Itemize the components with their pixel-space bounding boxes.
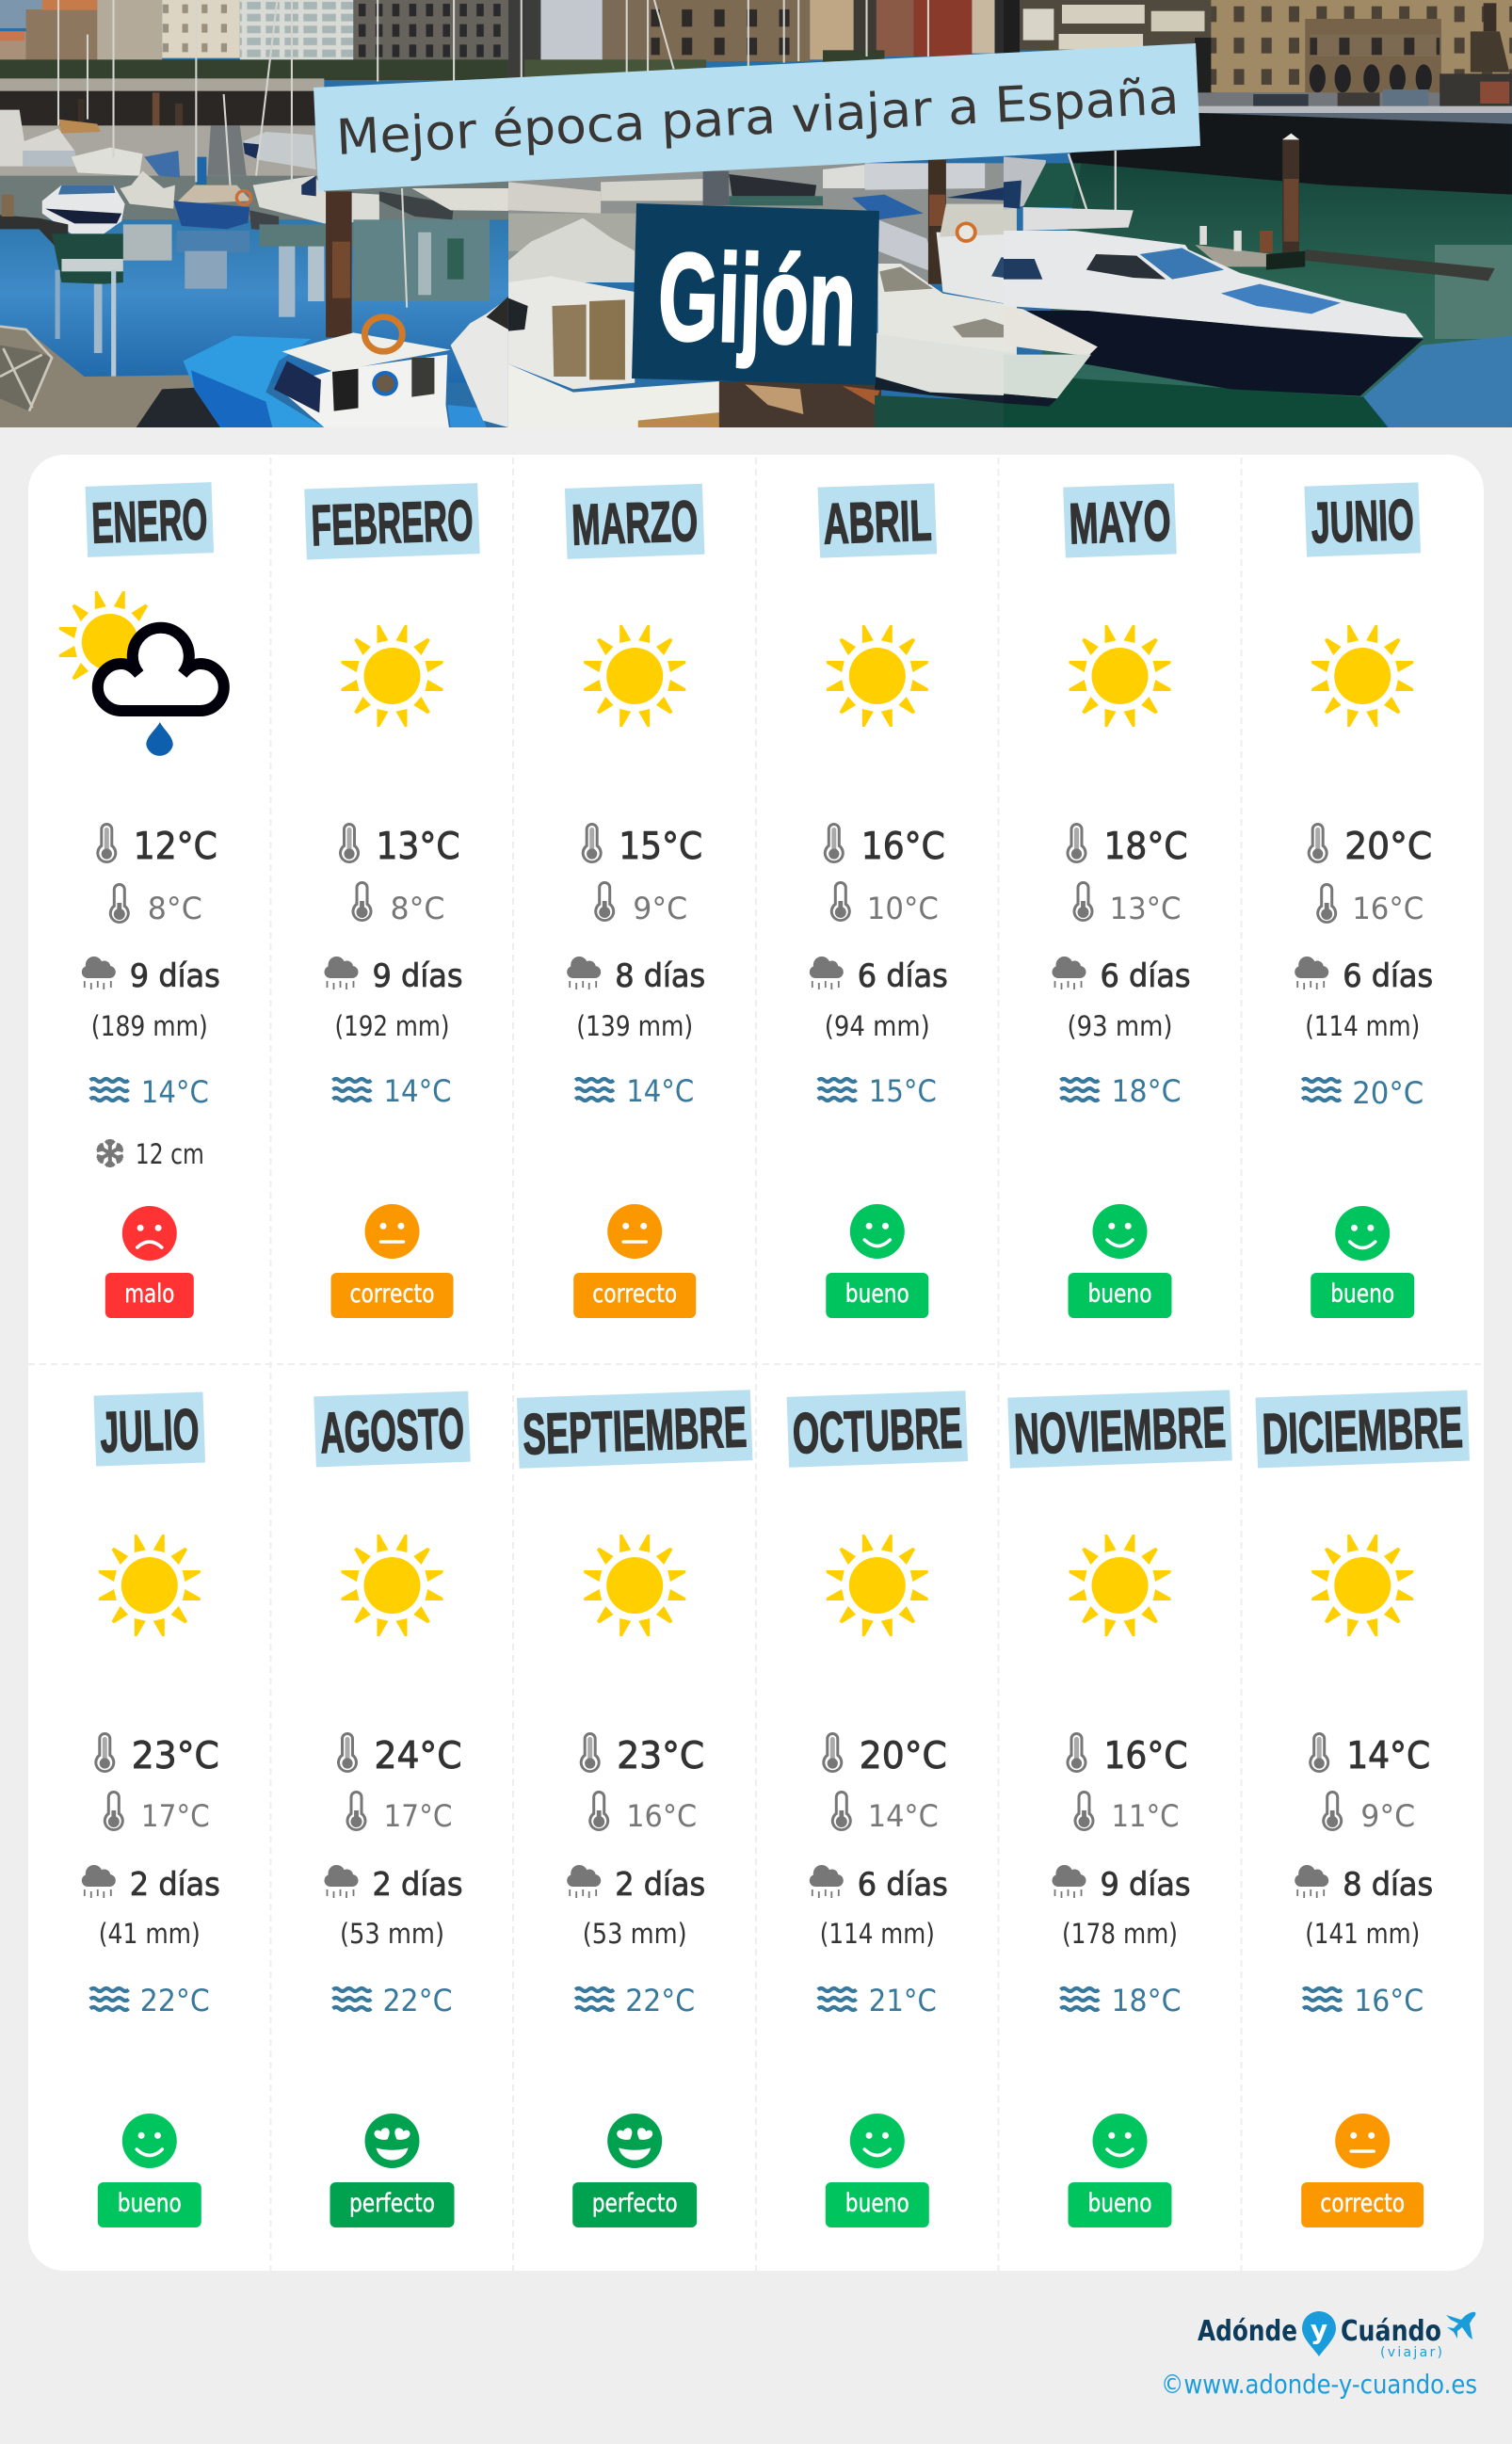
icon: min thermometer [1316, 883, 1337, 924]
panel: abril [810, 483, 948, 1318]
title banner [314, 43, 1200, 191]
rating badge: perfecto [572, 2182, 697, 2227]
month label: agosto [314, 1391, 471, 1467]
icon: rain cloud [567, 1865, 601, 1898]
logo: Adónde y Cuándo: Adónde [1198, 2315, 1297, 2348]
icon: happy face [850, 1204, 905, 1259]
min temperature: 10°C [867, 891, 939, 926]
month label: marzo: MARZO [571, 489, 699, 557]
icon: neutral face [1335, 2114, 1390, 2168]
icon: happy face [1335, 1206, 1390, 1261]
icon: sun [827, 625, 928, 727]
icon: sea waves [1302, 1079, 1341, 1101]
rainy days: 8 días [615, 957, 705, 995]
rating badge: bueno: bueno [1330, 1279, 1394, 1309]
icon: min thermometer [109, 883, 130, 924]
icon: rain cloud [1053, 957, 1086, 989]
icon: snowflake [96, 1139, 124, 1167]
icon: sun [1070, 625, 1171, 727]
month label: junio [1304, 482, 1421, 557]
icon: rain cloud [1295, 1865, 1328, 1898]
rainy days: 9 días [373, 957, 463, 995]
icon: max thermometer [1066, 823, 1086, 863]
icon: rain cloud [324, 957, 358, 989]
sea temperature: 18°C [1111, 1983, 1181, 2018]
rating badge: correcto [1301, 2182, 1424, 2227]
month label: mayo [1063, 483, 1177, 558]
rainy days: 9 días [1100, 1866, 1190, 1904]
logo: Adónde y Cuándo: (viajar) [1380, 2345, 1442, 2360]
rating badge: bueno [1068, 1273, 1171, 1318]
panel: febrero [304, 483, 480, 1318]
rating badge: correcto [331, 1273, 454, 1318]
city name box: Gijón: Gijón [656, 227, 858, 371]
icon: rain cloud [567, 957, 601, 989]
icon: min thermometer [831, 1791, 852, 1831]
rating badge: perfecto [330, 2182, 454, 2227]
rainy days: 6 días [1100, 957, 1190, 995]
rainfall: (94 mm) [825, 1010, 930, 1042]
icon: heart-eyes face [607, 2114, 662, 2168]
logo: Adónde y Cuándo: y [1311, 2314, 1327, 2345]
icon: max thermometer [822, 1732, 843, 1773]
icon: sea waves [1303, 1988, 1342, 2010]
icon: sun [99, 1535, 201, 1636]
min temperature: 9°C [1360, 1798, 1415, 1834]
icon: sun [1070, 1535, 1171, 1636]
month label: julio [94, 1391, 205, 1467]
icon: max thermometer [580, 1732, 601, 1773]
icon: sun [341, 625, 442, 727]
icon: max thermometer [96, 823, 117, 863]
snowfall: 12 cm [136, 1138, 204, 1170]
panel: mayo [1053, 483, 1190, 1318]
rainy days: 9 días [130, 957, 220, 995]
sea temperature: 22°C [140, 1983, 210, 2018]
sea temperature: 20°C [1352, 1075, 1424, 1111]
rating badge: perfecto: perfecto [592, 2189, 678, 2218]
icon: max thermometer [824, 823, 844, 863]
icon: sad face [122, 1206, 177, 1261]
rainy days: 6 días [1343, 957, 1433, 995]
month label: febrero: FEBRERO [310, 488, 475, 557]
max temperature: 14°C [1346, 1734, 1430, 1777]
icon: rain cloud [810, 957, 844, 989]
rating badge: bueno: bueno [845, 2189, 909, 2218]
panel: octubre [787, 1391, 968, 2227]
rating badge: perfecto: perfecto [349, 2189, 435, 2218]
month label: febrero [304, 483, 480, 559]
sea temperature: 22°C [625, 1983, 695, 2018]
icon: sea waves [333, 1988, 371, 2010]
max temperature: 20°C [860, 1734, 947, 1777]
panel: marzo [565, 484, 705, 1318]
icon: sun [1311, 625, 1413, 727]
rainfall: (41 mm) [99, 1918, 201, 1950]
min temperature: 8°C [148, 891, 202, 926]
max temperature: 23°C [132, 1734, 219, 1777]
month label: octubre [787, 1391, 968, 1468]
month label: septiembre: SEPTIEMBRE [522, 1394, 748, 1467]
rainfall: (114 mm) [1305, 1010, 1420, 1042]
icon: sea waves [818, 1079, 857, 1101]
icon: max thermometer [94, 1732, 115, 1773]
icon: sun [341, 1535, 442, 1636]
icon: sun [584, 1535, 685, 1636]
rating badge: bueno: bueno [845, 1279, 909, 1309]
rainfall: (93 mm) [1068, 1010, 1173, 1042]
icon: min thermometer [104, 1791, 124, 1831]
panel: julio [82, 1391, 220, 2227]
icon: sun with cloud and rain drop [59, 591, 224, 756]
month label: julio: JULIO [99, 1397, 201, 1464]
rating badge: bueno [826, 1273, 928, 1318]
icon: max thermometer [1066, 1732, 1086, 1773]
rating badge: bueno [1068, 2182, 1171, 2227]
month label: mayo: MAYO [1068, 489, 1172, 555]
panel: junio [1295, 482, 1433, 1318]
rating badge: bueno: bueno [1088, 2189, 1152, 2218]
panel: agosto [314, 1391, 471, 2227]
max temperature: 15°C [619, 825, 702, 868]
icon: max thermometer [337, 1732, 358, 1773]
month label: enero: ENERO [90, 487, 209, 555]
min temperature: 13°C [1109, 891, 1181, 926]
max temperature: 13°C [377, 825, 459, 868]
rainfall: (141 mm) [1305, 1918, 1420, 1950]
rainy days: 2 días [130, 1866, 220, 1904]
rainy days: 8 días [1343, 1866, 1433, 1904]
rainy days: 6 días [858, 957, 948, 995]
city name box: Gijón [632, 203, 879, 385]
panel: noviembre [1007, 1390, 1232, 2227]
icon: sea waves [818, 1988, 857, 2010]
rainfall: (139 mm) [576, 1010, 693, 1042]
icon: happy face [1092, 1204, 1147, 1259]
month label: marzo [565, 484, 704, 559]
max temperature: 23°C [617, 1734, 704, 1777]
rainfall: (53 mm) [583, 1918, 687, 1950]
icon: heart-eyes face [365, 2114, 420, 2168]
panel: septiembre [517, 1390, 752, 2227]
icon: sun [584, 625, 685, 727]
min temperature: 11°C [1111, 1798, 1179, 1834]
icon: max thermometer [1308, 823, 1328, 863]
rating badge: bueno [1311, 1273, 1414, 1318]
sea temperature: 14°C [141, 1074, 209, 1110]
icon: rain cloud [810, 1865, 844, 1898]
sea temperature: 16°C [1354, 1983, 1424, 2018]
icon: happy face [850, 2114, 905, 2168]
icon: sun [827, 1535, 928, 1636]
icon: min thermometer [1073, 881, 1094, 922]
logo: Adónde y Cuándo: Cuándo [1341, 2315, 1441, 2348]
header photo: Gijón marina [0, 0, 1512, 427]
rating badge: malo [105, 1273, 194, 1318]
rainfall: (192 mm) [335, 1010, 450, 1042]
icon: sea waves [1060, 1079, 1099, 1101]
icon: min thermometer [352, 881, 373, 922]
month label: noviembre: NOVIEMBRE [1013, 1395, 1227, 1466]
min temperature: 16°C [626, 1798, 697, 1834]
sea temperature: 22°C [382, 1983, 452, 2018]
month label: abril: ABRIL [822, 489, 933, 555]
icon: min thermometer [1322, 1791, 1343, 1831]
icon: neutral face [365, 1204, 420, 1259]
min temperature: 17°C [141, 1798, 210, 1834]
icon: rain cloud [324, 1865, 358, 1898]
icon: sea waves [575, 1988, 614, 2010]
icon: min thermometer [594, 881, 615, 922]
logo: Adónde y Cuándo [1198, 2311, 1475, 2360]
rating badge: correcto: correcto [592, 1279, 677, 1309]
rainy days: 6 días [858, 1866, 948, 1904]
icon: min thermometer [830, 881, 851, 922]
icon: max thermometer [339, 823, 360, 863]
min temperature: 17°C [384, 1798, 452, 1834]
min temperature: 9°C [633, 891, 687, 926]
month label: junio: JUNIO [1311, 488, 1415, 555]
rating badge: bueno: bueno [118, 2189, 182, 2218]
rainfall: (189 mm) [91, 1010, 208, 1042]
icon: min thermometer [588, 1791, 609, 1831]
min temperature: 14°C [868, 1798, 939, 1834]
icon: rain cloud [1053, 1865, 1086, 1898]
max temperature: 18°C [1103, 825, 1188, 868]
rainfall: (53 mm) [340, 1918, 444, 1950]
month label: octubre: OCTUBRE [792, 1395, 963, 1466]
rating badge: malo: malo [124, 1279, 174, 1309]
icon: sea waves [333, 1079, 371, 1101]
icon: rain cloud [82, 1865, 116, 1898]
max temperature: 16°C [861, 825, 945, 868]
max temperature: 20°C [1344, 825, 1432, 868]
icon: min thermometer [346, 1791, 367, 1831]
icon: sea waves [90, 1079, 129, 1101]
month label: enero [86, 482, 214, 557]
rainy days: 2 días [615, 1866, 705, 1904]
icon: rain cloud [1295, 957, 1328, 989]
rating badge: correcto [573, 1273, 696, 1318]
rainy days: 2 días [373, 1866, 463, 1904]
sea temperature: 15°C [869, 1073, 937, 1109]
min temperature: 8°C [390, 891, 444, 926]
month label: agosto: AGOSTO [319, 1396, 465, 1465]
panel: diciembre [1255, 1391, 1470, 2227]
rating badge: correcto: correcto [1320, 2189, 1405, 2218]
sea temperature: 21°C [869, 1983, 937, 2018]
month label: noviembre [1007, 1390, 1232, 1469]
icon: happy face [1092, 2114, 1147, 2168]
max temperature: 24°C [375, 1734, 461, 1777]
sea temperature: 18°C [1111, 1073, 1181, 1109]
rating badge: bueno: bueno [1088, 1279, 1152, 1309]
icon: sun [1311, 1535, 1413, 1636]
panel: enero [59, 482, 224, 1318]
main card [28, 455, 1484, 2271]
max temperature: 16°C [1103, 1734, 1188, 1777]
icon: happy face [122, 2114, 177, 2168]
min temperature: 16°C [1352, 891, 1424, 926]
rating badge: bueno [826, 2182, 929, 2227]
month label: septiembre [517, 1390, 752, 1469]
title banner: Mejor época para viajar a España [335, 69, 1181, 167]
month label: abril [818, 483, 937, 558]
icon: min thermometer [1073, 1791, 1094, 1831]
rating badge: bueno [98, 2182, 201, 2227]
icon: rain cloud [82, 957, 116, 989]
icon: max thermometer [582, 823, 603, 863]
rating badge: correcto: correcto [350, 1279, 435, 1309]
icon: sea waves [1060, 1988, 1099, 2010]
icon: sea waves [90, 1988, 129, 2010]
sea temperature: 14°C [626, 1073, 694, 1109]
max temperature: 12°C [134, 825, 217, 868]
sea temperature: 14°C [384, 1073, 452, 1109]
icon: max thermometer [1309, 1732, 1329, 1773]
icon: neutral face [607, 1204, 662, 1259]
rainfall: (114 mm) [820, 1918, 935, 1950]
rainfall: (178 mm) [1062, 1918, 1178, 1950]
icon: sea waves [575, 1079, 614, 1101]
